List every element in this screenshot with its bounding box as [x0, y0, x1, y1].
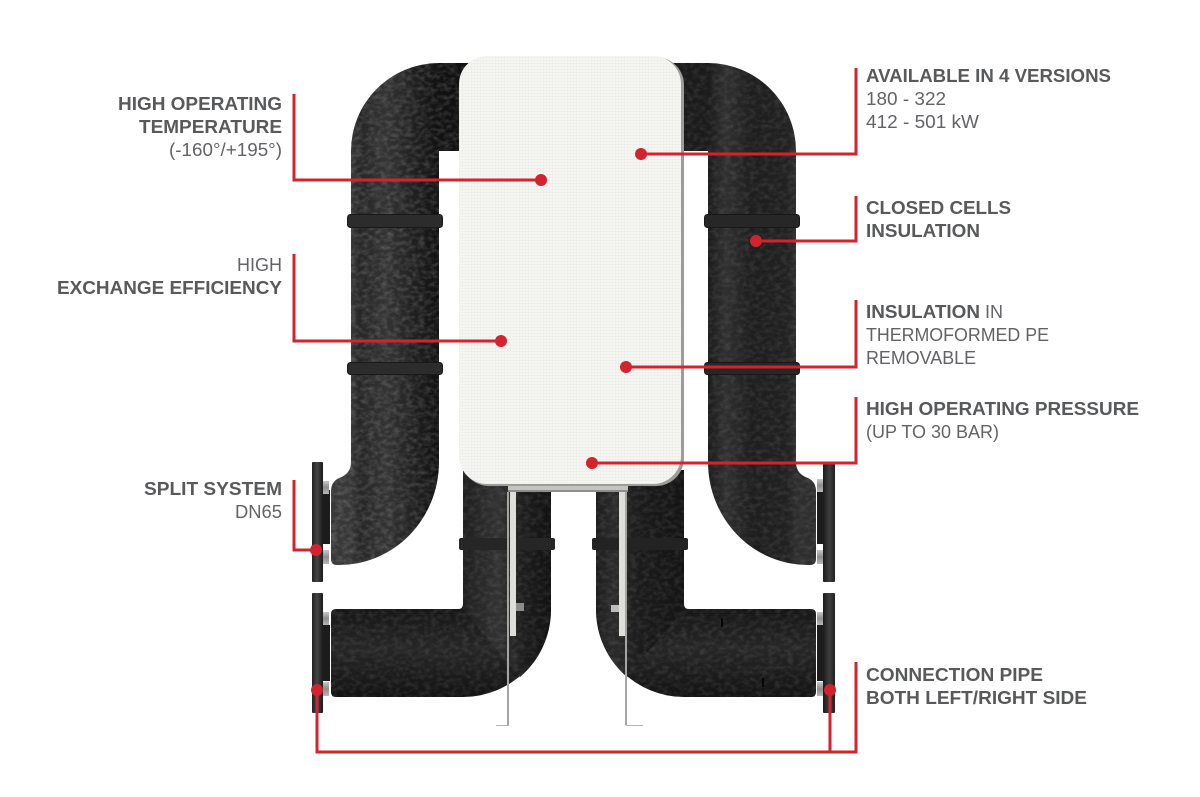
pipe: lower right elbow	[596, 470, 816, 697]
callout line: operating pressure	[586, 397, 856, 469]
label: available versions	[866, 66, 1111, 132]
label: insulation in thermoformed PE	[866, 302, 1049, 368]
collars: upper right pipe	[704, 214, 800, 374]
marks on lower right pipe	[721, 618, 764, 687]
label: split system: SPLIT SYSTEM	[144, 479, 282, 499]
collar: lower right pipe	[592, 538, 688, 550]
flanges: left side	[312, 462, 330, 713]
label: insulation in thermoformed PE: INSULATION	[866, 302, 980, 322]
collars: upper left pipe	[348, 214, 442, 374]
label: connection pipe: BOTH LEFT/RIGHT SIDE	[866, 688, 1087, 708]
label: available versions: AVAILABLE IN 4 VERSIONS	[866, 66, 1111, 86]
label: connection pipe	[866, 665, 1087, 708]
label: high exchange efficiency	[57, 255, 282, 298]
bracket: bottom support	[496, 484, 643, 726]
label: closed cells insulation: CLOSED CELLS	[866, 198, 1011, 218]
label: available versions: 412 - 501 kW	[866, 112, 979, 132]
pipe: upper right elbow	[660, 63, 816, 565]
callout line: connection pipe	[311, 662, 856, 752]
label: connection pipe: CONNECTION PIPE	[866, 665, 1043, 685]
label: high operating temperature	[118, 94, 282, 160]
label: high operating pressure	[866, 399, 1139, 442]
label: insulation in thermoformed PE: IN	[985, 302, 1003, 322]
label: available versions: 180 - 322	[866, 89, 946, 109]
label: insulation in thermoformed PE: THERMOFORMED PE	[866, 325, 1049, 345]
pipe: lower left elbow	[331, 470, 551, 697]
label: high operating pressure: HIGH OPERATING PRESSURE	[866, 399, 1139, 419]
label: split system: DN65	[235, 502, 282, 522]
label: split system	[144, 479, 282, 522]
collar: lower left pipe	[459, 538, 555, 550]
label: closed cells insulation: INSULATION	[866, 221, 980, 241]
label: high exchange efficiency: HIGH	[237, 255, 282, 275]
flanges: right side	[817, 462, 835, 713]
label: high exchange efficiency: EXCHANGE EFFICIENCY	[57, 278, 282, 298]
label: high operating temperature: HIGH OPERATING	[118, 94, 282, 114]
panel: thermoformed insulation cover	[459, 56, 684, 486]
label: high operating pressure: (UP TO 30 BAR)	[866, 422, 999, 442]
label: closed cells insulation	[866, 198, 1011, 241]
callout line: thermoformed insulation	[620, 300, 856, 373]
callout line: versions	[635, 68, 856, 160]
label: high operating temperature: (-160°/+195°)	[169, 140, 282, 160]
callout line: split system	[294, 480, 322, 556]
pipe: upper left elbow	[331, 63, 480, 565]
label: insulation in thermoformed PE: REMOVABLE	[866, 348, 976, 368]
label: high operating temperature: TEMPERATURE	[139, 117, 282, 137]
callout line: operating temperature	[294, 94, 547, 186]
callout line: closed cells	[750, 196, 856, 247]
callout line: exchange efficiency	[294, 254, 507, 347]
